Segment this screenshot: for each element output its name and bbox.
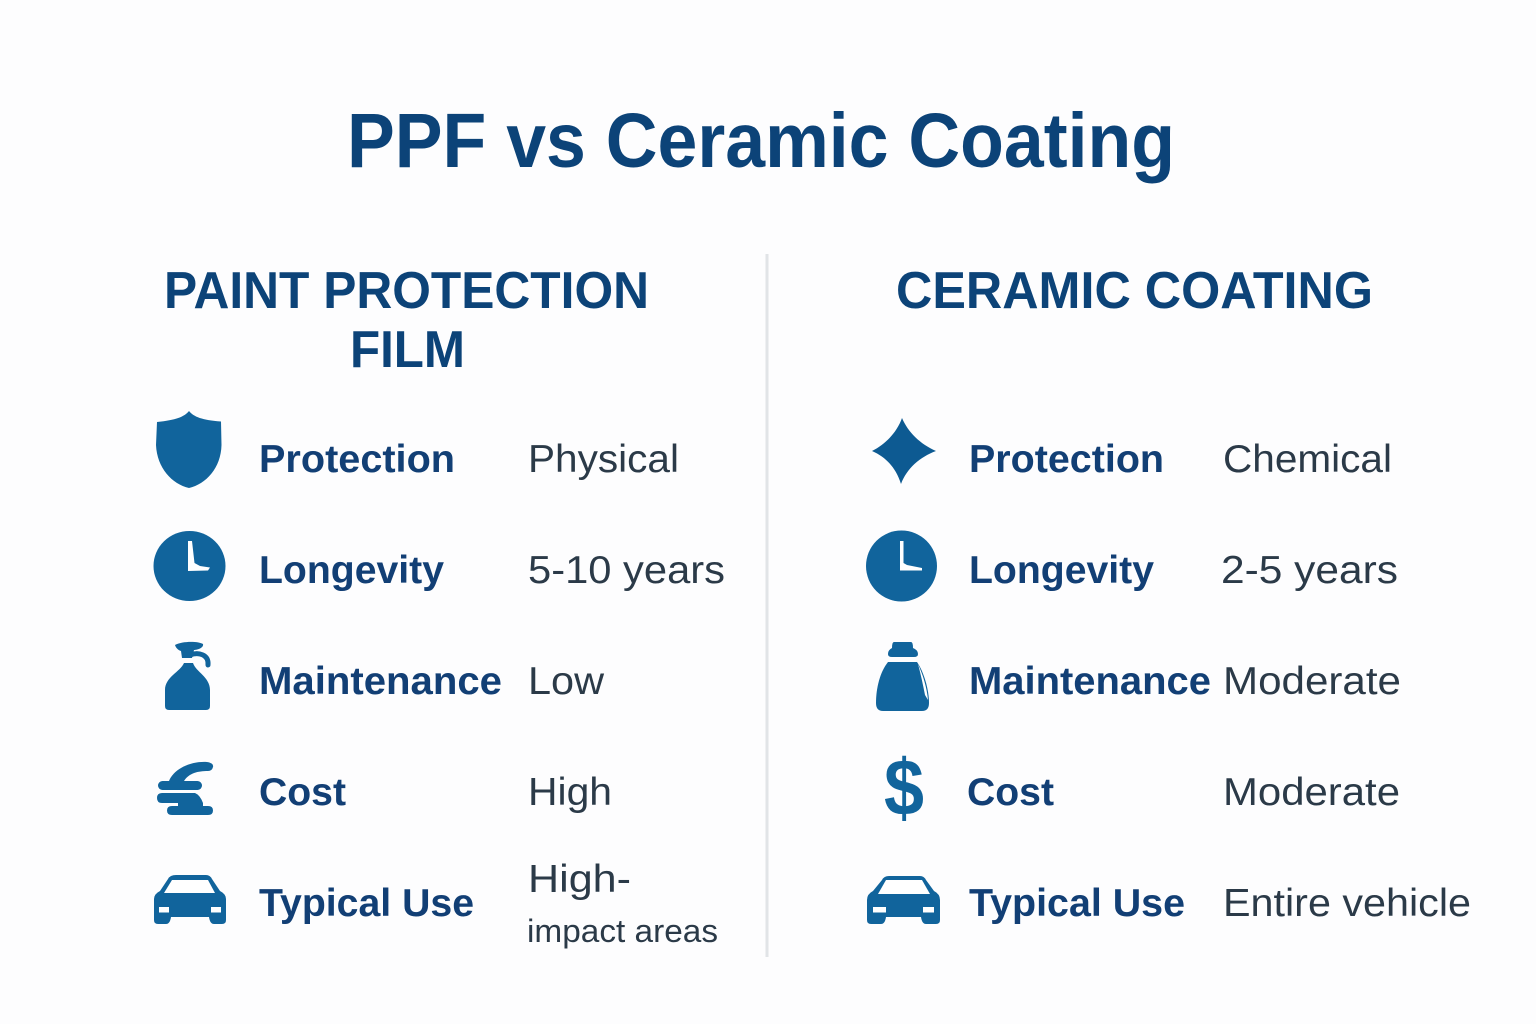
row: maintenance [876, 642, 1401, 711]
value: high-impact areas [527, 858, 718, 949]
row: maintenance [165, 642, 605, 710]
value: 2-5 years: 2-5 years [1221, 549, 1398, 592]
row: cost [157, 762, 612, 815]
row: protection [156, 411, 679, 488]
row: typical use [867, 876, 1471, 925]
value: 5-10 years: 5-10 years [528, 549, 725, 592]
label: typical use: Typical Use [969, 882, 1185, 925]
row: longevity [866, 530, 1398, 602]
value: high-impact areas: impact areas [527, 913, 718, 949]
value: high: High [528, 771, 612, 814]
label: cost: Cost [967, 771, 1054, 814]
icon: car [867, 876, 940, 924]
value: moderate: Moderate [1223, 660, 1401, 703]
panel: paint protection film [154, 262, 725, 949]
row: protection [872, 418, 1392, 484]
value: moderate: Moderate [1223, 771, 1400, 814]
label: typical use: Typical Use [259, 882, 474, 925]
column divider [766, 254, 768, 957]
icon: car [154, 875, 226, 924]
icon: abstract cost symbol [157, 762, 213, 815]
row: typical use [154, 858, 718, 949]
value: high-impact areas: High- [528, 858, 631, 901]
icon: four-point star [872, 418, 936, 484]
panel: ceramic coating [866, 262, 1471, 925]
heading: ceramic coating: CERAMIC COATING [896, 262, 1373, 320]
value: low: Low [528, 660, 605, 703]
heading: paint protection film: PAINT PROTECTION [164, 262, 649, 320]
label: cost: Cost [259, 771, 346, 814]
heading: paint protection film: FILM [350, 321, 465, 379]
label: maintenance: Maintenance [259, 660, 502, 703]
heading: paint protection film [164, 262, 649, 379]
label: protection: Protection [969, 438, 1164, 481]
value: chemical: Chemical [1223, 438, 1392, 481]
row: longevity [154, 531, 725, 601]
value: entire vehicle: Entire vehicle [1223, 882, 1471, 925]
icon: clock [154, 531, 226, 601]
title: PPF vs Ceramic Coating [347, 98, 1175, 184]
icon: dollar sign: $ [884, 743, 924, 832]
icon: bottle [876, 642, 929, 711]
value: physical: Physical [528, 438, 679, 481]
label: protection: Protection [259, 438, 455, 481]
icon: spray bottle [165, 642, 210, 710]
label: longevity: Longevity [259, 549, 444, 592]
label: maintenance: Maintenance [969, 660, 1211, 703]
icon: clock [866, 530, 937, 602]
label: longevity: Longevity [969, 549, 1154, 592]
icon: shield [156, 411, 222, 488]
row: cost [884, 743, 1400, 832]
